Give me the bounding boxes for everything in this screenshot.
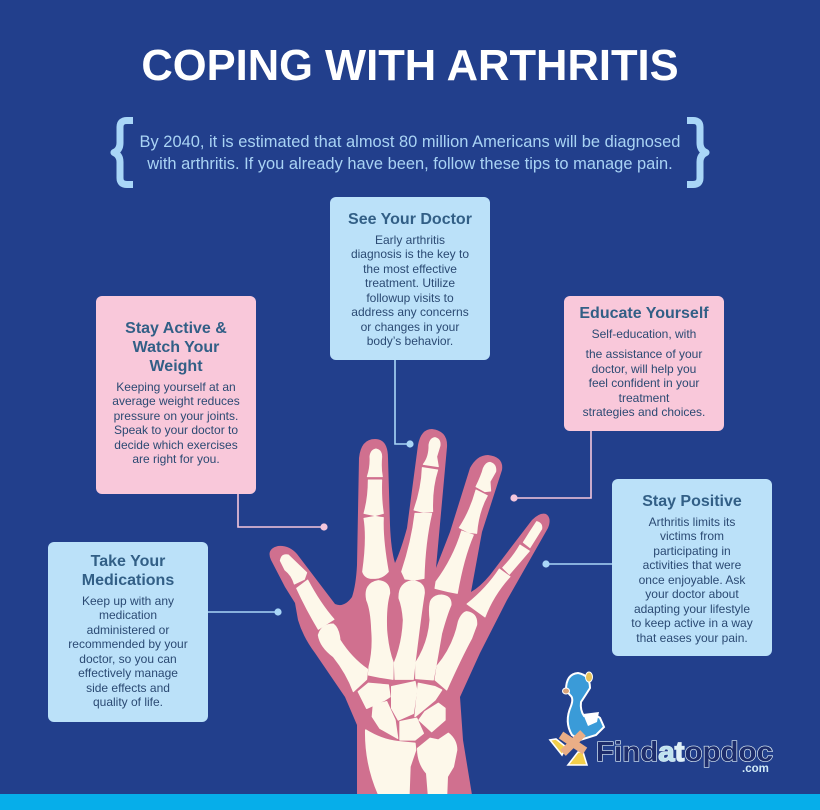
body continued: educate yourself: doctor, will help you [592, 362, 696, 376]
body: stay positive: Arthritis limits its [649, 515, 735, 529]
body: take your medications: Keep up with any [82, 594, 174, 608]
duck foot right [568, 752, 587, 765]
body: stay active: Speak to your doctor to [114, 423, 238, 437]
connector: stay active [238, 494, 328, 531]
body: take your medications [68, 594, 188, 709]
body: see your doctor [351, 233, 469, 348]
body: take your medications: doctor, so you can [79, 652, 177, 666]
body: educate yourself: Self-education, with [592, 327, 696, 341]
connector: educate yourself [510, 431, 591, 502]
panel: take your medications [48, 542, 208, 722]
body: stay positive: your doctor about [645, 587, 739, 601]
heading: stay active [125, 320, 227, 375]
wrist and forearm bones [358, 682, 457, 794]
intro text [140, 133, 680, 172]
palm and thumb bones [280, 555, 477, 692]
body: stay active: are right for you. [132, 452, 220, 466]
right brace [687, 120, 706, 184]
heading: take your medications: Take Your [91, 553, 165, 570]
duck bill [562, 688, 570, 694]
body: take your medications: recommended by your [68, 637, 188, 651]
body: see your doctor: diagnosis is the key to [351, 247, 469, 261]
body: stay positive: participating in [653, 544, 731, 558]
heading: educate yourself: Educate Yourself [579, 305, 709, 322]
heading: take your medications: Medications [82, 572, 174, 589]
title: COPING WITH ARTHRITIS [141, 42, 679, 90]
body: take your medications: quality of life. [93, 695, 163, 709]
body: stay positive: to keep active in a way [631, 616, 753, 630]
body: stay active: Keeping yourself at an [116, 380, 236, 394]
logo [550, 672, 773, 775]
body: stay active: decide which exercises [114, 438, 238, 452]
heading: see your doctor: See Your Doctor [348, 211, 472, 228]
body: stay active: average weight reduces [112, 394, 240, 408]
body: stay positive: once enjoyable. Ask [639, 573, 745, 587]
icon: duck mascot [550, 672, 604, 765]
body: stay positive: activities that were [643, 558, 741, 572]
bottom bar [0, 794, 820, 810]
hand silhouette [270, 429, 550, 795]
hand illustration [270, 429, 550, 795]
bandage [561, 733, 585, 753]
connector: see your doctor [395, 360, 414, 448]
heading: stay active: Stay Active & [125, 320, 227, 337]
connector: stay positive [542, 560, 612, 568]
body: see your doctor: Early arthritis [375, 233, 445, 247]
body continued: educate yourself: strategies and choices. [583, 405, 705, 419]
heading: stay positive: Stay Positive [642, 493, 742, 510]
body: stay positive: victims from [660, 529, 724, 543]
panel: stay positive [612, 479, 772, 656]
body continued: educate yourself: feel confident in your [589, 376, 699, 390]
panel: educate yourself [564, 296, 724, 431]
body: see your doctor: the most effective [363, 262, 457, 276]
body: stay active [112, 380, 240, 466]
body: stay active: pressure on your joints. [114, 409, 238, 423]
intro text: By 2040, it is estimated that almost 80 million Americans will be diagnosed [140, 133, 680, 151]
body: take your medications: side effects and [86, 681, 170, 695]
logo .com: .com [742, 763, 769, 775]
panel: see your doctor [330, 197, 490, 360]
body continued: educate yourself: treatment [619, 391, 669, 405]
finger bones [363, 438, 542, 617]
body: see your doctor: followup visits to [366, 291, 454, 305]
body: stay positive [631, 515, 753, 645]
panel: stay active [96, 296, 256, 494]
heading: take your medications [82, 553, 174, 589]
body continued: educate yourself [583, 347, 705, 419]
heading: stay active: Watch Your [133, 339, 219, 356]
body: take your medications: medication [99, 608, 157, 622]
body: take your medications: effectively manage [78, 666, 178, 680]
body: see your doctor: treatment. Utilize [365, 276, 455, 290]
body: stay positive: that eases your pain. [636, 631, 748, 645]
body: see your doctor: address any concerns [351, 305, 469, 319]
body: take your medications: administered or [87, 623, 169, 637]
body continued: educate yourself: the assistance of your [586, 347, 702, 361]
logo wordmark: Findatopdoc [596, 736, 773, 767]
duck wing [583, 712, 599, 726]
intro text: with arthritis. If you already have been, follow these tips to manage pain. [147, 154, 673, 172]
heading: stay active: Weight [149, 358, 203, 375]
body: stay positive: adapting your lifestyle [634, 602, 750, 616]
connector: take your medications [208, 608, 282, 616]
duck hat [586, 672, 592, 682]
left brace [114, 120, 133, 184]
body: see your doctor: body’s behavior. [367, 334, 453, 348]
duck foot left [550, 739, 566, 755]
body: see your doctor: or changes in your [361, 320, 459, 334]
